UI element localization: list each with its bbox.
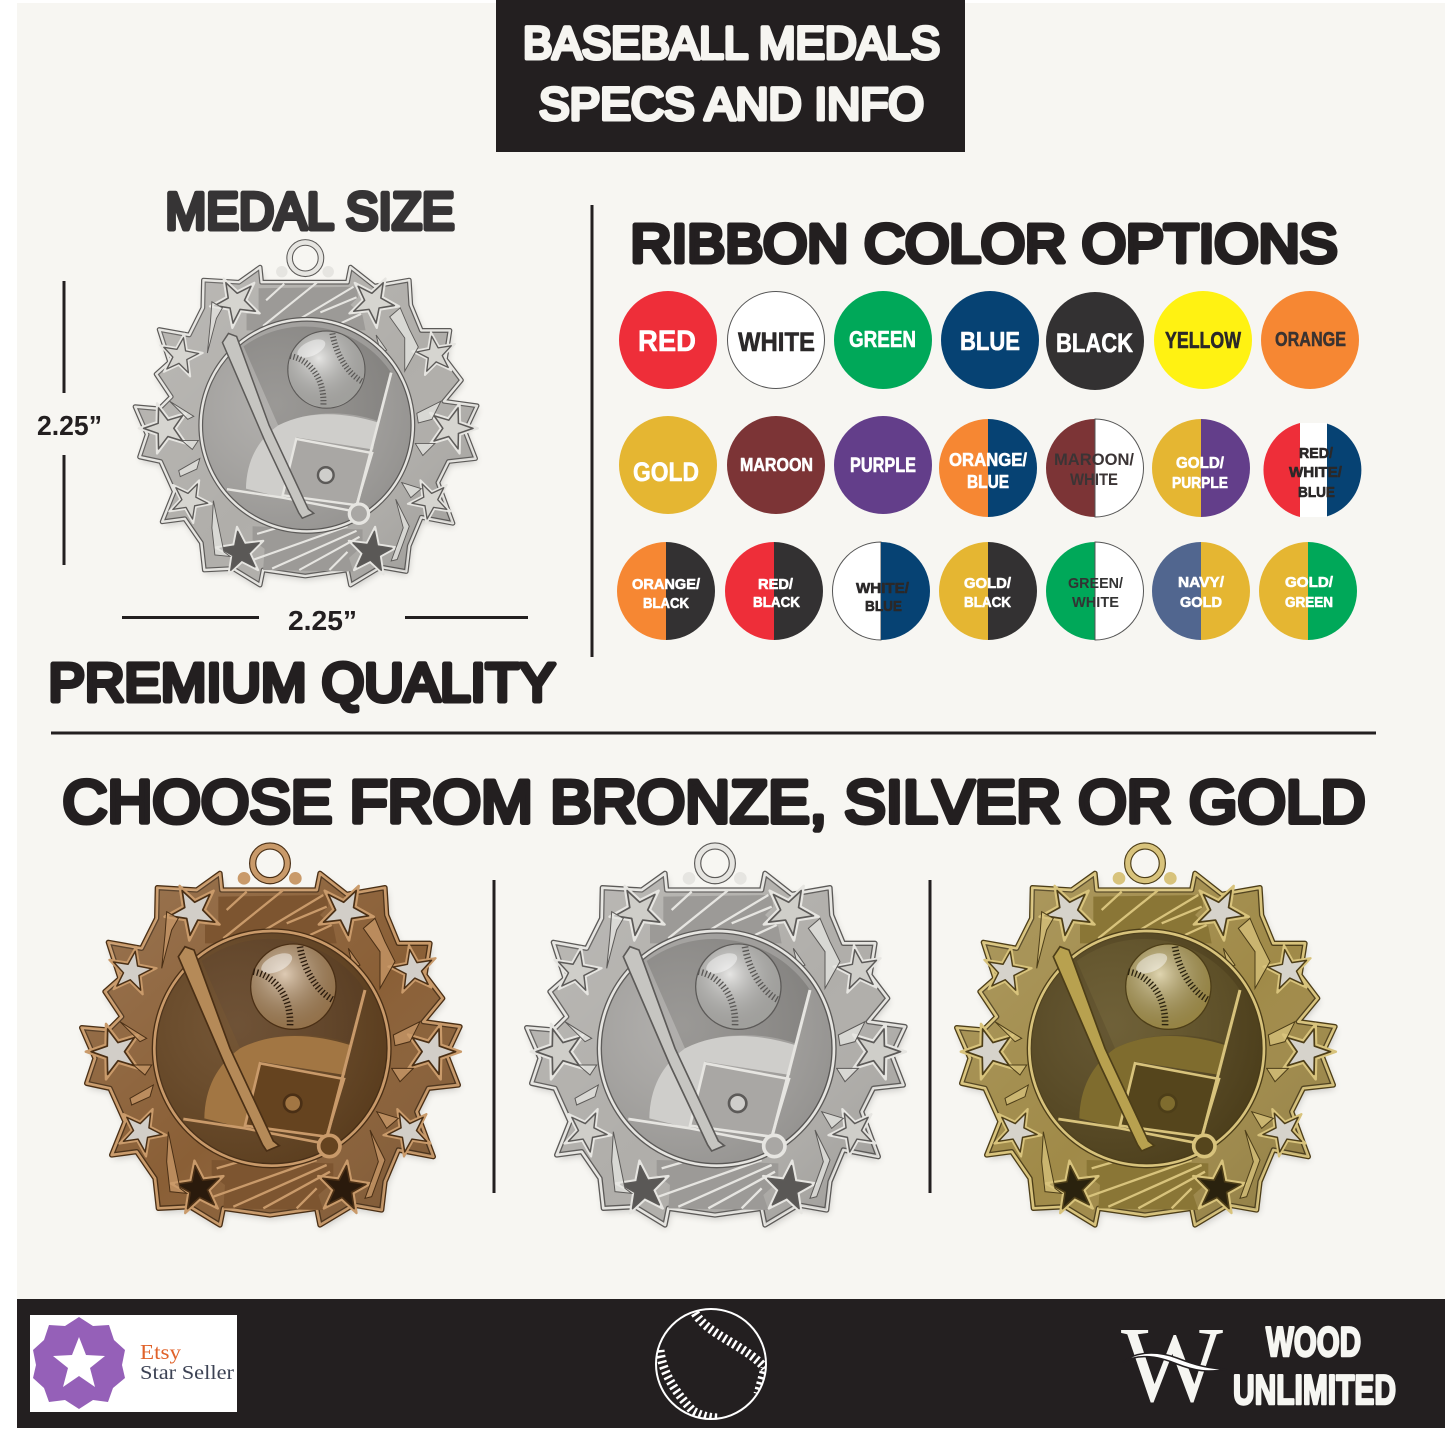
swatch: green and white: WHITE [1072, 594, 1119, 611]
swatch: orange and black: ORANGE/ [632, 576, 701, 593]
swatch: gold and black: GOLD/ [964, 575, 1012, 592]
swatch: white: WHITE [738, 327, 815, 357]
swatch: green: GREEN [849, 326, 916, 352]
swatch: orange and blue: BLUE [967, 472, 1009, 492]
swatch: gold: GOLD [633, 457, 699, 487]
logo: wood unlimited: W [1121, 1306, 1223, 1425]
swatch: blue [941, 291, 1039, 389]
swatch: red and black [725, 542, 823, 640]
dimension: width 2.25 inches [122, 605, 528, 636]
swatch: white and blue [832, 542, 930, 640]
swatch: navy and gold: GOLD [1180, 594, 1222, 611]
medal: silver size reference [135, 242, 478, 588]
swatch: yellow [1154, 291, 1252, 389]
swatch: red, white and blue [1263, 423, 1361, 517]
swatch: white and blue: WHITE/ [856, 580, 910, 597]
title banner [496, 0, 965, 152]
swatch: purple: PURPLE [850, 454, 916, 477]
dimension: height 2.25 inches [37, 281, 102, 565]
swatch: gold and green: GREEN [1285, 594, 1333, 611]
swatch: orange and black [617, 542, 715, 640]
swatch: gold and purple: PURPLE [1172, 475, 1228, 492]
swatch: gold and black: BLACK [964, 594, 1011, 611]
swatch: blue: BLUE [960, 326, 1020, 356]
swatch: red, white and blue: WHITE/ [1289, 464, 1343, 481]
swatch: red, white and blue: BLUE [1298, 484, 1335, 501]
logo: wood unlimited: WOOD [1266, 1318, 1361, 1365]
heading: medal size: MEDAL SIZE [166, 183, 454, 241]
swatch: red [619, 291, 717, 389]
swatch: orange and blue [939, 419, 1037, 517]
heading: choose finish: CHOOSE FROM BRONZE, SILVER OR GOLD [62, 768, 1366, 836]
swatch: gold and green [1259, 542, 1357, 640]
medal: bronze [82, 846, 461, 1228]
swatch: orange and black: BLACK [643, 595, 689, 612]
swatch: purple [834, 416, 932, 514]
swatch: orange: ORANGE [1275, 329, 1346, 351]
swatch: maroon and white: MAROON/ [1054, 450, 1134, 469]
swatch: maroon and white: WHITE [1070, 470, 1118, 489]
swatch: black: BLACK [1056, 328, 1133, 358]
badge: etsy star seller [30, 1315, 237, 1412]
badge: etsy star seller: Etsy [140, 1340, 182, 1364]
icon: baseball [656, 1309, 766, 1419]
swatch: maroon and white [1046, 419, 1143, 517]
title banner: SPECS AND INFO [539, 78, 924, 130]
title banner: BASEBALL MEDALS [523, 18, 940, 68]
swatch: orange and blue: ORANGE/ [949, 450, 1027, 470]
swatch: orange [1261, 291, 1359, 389]
swatch: black [1046, 292, 1144, 390]
swatch: maroon: MAROON [740, 455, 813, 475]
dimension: width 2.25 inches: 2.25” [288, 605, 357, 636]
dimension: height 2.25 inches: 2.25” [37, 410, 102, 441]
swatch: navy and gold: NAVY/ [1178, 574, 1225, 591]
panel: ribbon swatches [617, 291, 1361, 640]
swatch: green and white [1046, 542, 1143, 640]
swatch: navy and gold [1152, 542, 1250, 640]
swatch: red, white and blue: RED/ [1299, 445, 1334, 462]
medal: gold [957, 846, 1336, 1228]
swatch: white and blue: BLUE [865, 598, 902, 615]
swatch: gold [619, 416, 717, 514]
swatch: gold and black [939, 542, 1037, 640]
footer bar [17, 1299, 1445, 1428]
badge: etsy star seller: Star Seller [140, 1362, 234, 1384]
swatch: red and black: RED/ [758, 576, 794, 593]
heading: ribbon color options: RIBBON COLOR OPTIONS [630, 214, 1338, 274]
swatch: gold and green: GOLD/ [1285, 574, 1334, 591]
swatch: white [728, 292, 824, 388]
swatch: red: RED [638, 325, 696, 358]
swatch: green [834, 291, 932, 389]
swatch: green and white: GREEN/ [1068, 575, 1124, 592]
icon: star rosette [33, 1317, 125, 1409]
swatch: yellow: YELLOW [1165, 327, 1241, 353]
swatch: gold and purple [1152, 419, 1250, 517]
swatch: red and black: BLACK [753, 594, 800, 611]
medal: silver [527, 846, 906, 1228]
heading: premium quality: PREMIUM QUALITY [48, 653, 556, 713]
logo: wood unlimited [1121, 1306, 1396, 1425]
swatch: gold and purple: GOLD/ [1176, 455, 1225, 472]
swatch: maroon [727, 416, 825, 514]
